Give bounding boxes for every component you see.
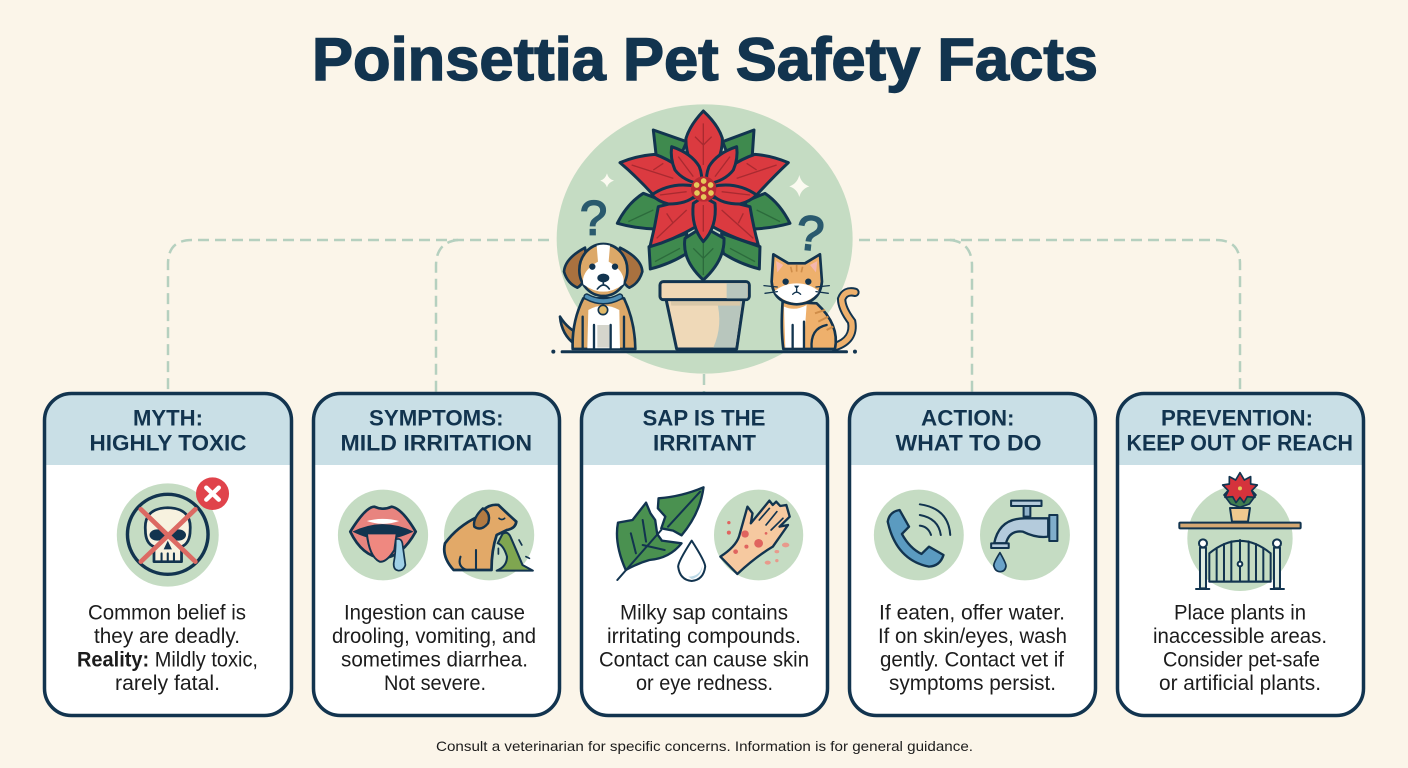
description: sometimes diarrhea. — [341, 648, 528, 672]
description — [1153, 602, 1327, 695]
heading: MYTH: — [133, 406, 203, 430]
icon: drooling mouth — [338, 490, 428, 580]
icon: crossed-out skull — [117, 477, 229, 587]
heading: KEEP OUT OF REACH — [1126, 430, 1353, 456]
heading — [1126, 406, 1353, 456]
description: or artificial plants. — [1159, 672, 1321, 695]
description — [77, 602, 258, 695]
description: If eaten, offer water. — [879, 602, 1065, 624]
description: Reality: Mildly toxic, — [77, 648, 258, 672]
dog — [560, 244, 642, 349]
icon: hand with rash — [714, 490, 803, 580]
heading: IRRITANT — [653, 430, 757, 456]
heading: SAP IS THE — [642, 406, 766, 430]
description: inaccessible areas. — [1153, 625, 1327, 648]
panel: sap is the irritant — [582, 394, 828, 716]
panel: prevention keep out of reach — [1118, 394, 1364, 716]
description: gently. Contact vet if — [880, 648, 1064, 672]
green leaves — [617, 130, 790, 280]
heading: MILD IRRITATION — [340, 430, 532, 456]
description: or eye redness. — [636, 672, 773, 695]
icon: phone call — [874, 490, 964, 580]
footer disclaimer: Consult a veterinarian for specific concerns. Information is for general guidance. — [436, 738, 973, 754]
icon: water faucet — [980, 490, 1070, 580]
description: Common belief is — [88, 602, 246, 624]
heading — [340, 406, 532, 456]
description: Place plants in — [1174, 602, 1306, 624]
description: Not severe. — [384, 672, 486, 695]
heading — [90, 406, 247, 456]
sparkles — [600, 173, 809, 197]
heading: PREVENTION: — [1161, 406, 1313, 430]
heading: SYMPTOMS: — [369, 406, 504, 430]
heading — [642, 406, 766, 456]
description: rarely fatal. — [115, 672, 220, 695]
icon: dog vomiting — [444, 490, 534, 580]
red bracts — [620, 111, 788, 247]
cat — [764, 254, 855, 349]
heading — [896, 406, 1042, 456]
icon: broken leaf and sap drop — [617, 487, 705, 581]
question mark: cat: ? — [794, 206, 826, 262]
description: Contact can cause skin — [599, 648, 809, 672]
heading: ACTION: — [921, 406, 1014, 430]
description: symptoms persist. — [889, 672, 1056, 695]
central illustration: poinsettia with dog and cat — [551, 104, 857, 374]
description: Consider pet-safe — [1163, 648, 1320, 672]
title: Poinsettia Pet Safety Facts — [312, 26, 1098, 93]
description: irritating compounds. — [607, 625, 801, 648]
flower centre — [691, 176, 716, 202]
description: If on skin/eyes, wash — [878, 625, 1067, 648]
panel: symptoms mild irritation — [314, 394, 560, 716]
flower pot — [660, 282, 749, 349]
panel: action what to do — [850, 394, 1096, 716]
description — [332, 602, 536, 695]
ground line — [551, 350, 857, 354]
description: Milky sap contains — [620, 602, 788, 624]
question mark: dog: ? — [580, 191, 607, 245]
description — [599, 602, 809, 695]
heading: WHAT TO DO — [896, 430, 1042, 456]
description — [878, 602, 1067, 695]
green backdrop circle — [557, 104, 853, 374]
dashed connectors from central illustration to cards — [168, 240, 1240, 392]
description: they are deadly. — [94, 625, 240, 648]
panel: myth highly toxic — [44, 394, 292, 716]
heading: HIGHLY TOXIC — [90, 430, 247, 456]
icon: plant on shelf above gate — [1179, 473, 1301, 591]
description: drooling, vomiting, and — [332, 625, 536, 648]
description: Ingestion can cause — [344, 602, 525, 624]
